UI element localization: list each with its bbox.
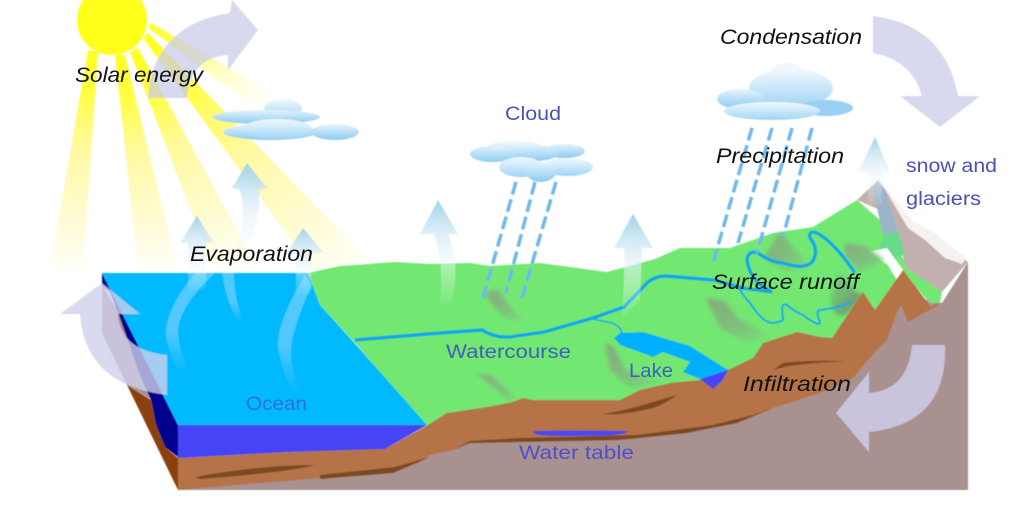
lake bbox=[614, 332, 728, 379]
ocean surface bbox=[102, 273, 427, 425]
snow patch bbox=[868, 248, 903, 280]
cloud: centre bbox=[470, 141, 593, 182]
cloud: right bbox=[717, 63, 853, 120]
ocean cliff bbox=[102, 285, 152, 400]
rain: centre cloud bbox=[483, 182, 556, 298]
label: watercourse: Watercourse bbox=[446, 342, 571, 363]
arrow: condensation down bbox=[873, 16, 980, 127]
evaporation arrows bbox=[180, 137, 890, 318]
label: infiltration: Infiltration bbox=[743, 373, 851, 396]
evaporation waves over ocean bbox=[166, 273, 312, 392]
coast soil edge bbox=[127, 385, 178, 490]
label: snow and: snow and bbox=[906, 156, 997, 177]
mountain bbox=[857, 180, 968, 292]
hill shadows bbox=[477, 232, 885, 403]
landscape block bbox=[102, 180, 968, 490]
runoff branch bbox=[738, 287, 850, 324]
green patch bbox=[878, 232, 905, 262]
label: cloud: Cloud bbox=[505, 104, 561, 125]
snow cap bbox=[880, 181, 966, 264]
water table bbox=[533, 430, 628, 436]
bedrock bbox=[178, 262, 968, 490]
sun rays bbox=[50, 23, 372, 268]
land surface bbox=[308, 200, 942, 427]
label: precipitation: Precipitation bbox=[716, 145, 844, 168]
arrow: ocean rising bbox=[60, 283, 167, 395]
icon: sun bbox=[77, 0, 147, 55]
lake feeder bbox=[593, 319, 622, 335]
ocean side wall bbox=[178, 425, 427, 458]
label: condensation: Condensation bbox=[720, 26, 862, 49]
label: ocean: Ocean bbox=[246, 394, 307, 415]
label: water table: Water table bbox=[519, 443, 634, 464]
lake depth bbox=[700, 370, 728, 389]
label: glaciers: glaciers bbox=[906, 189, 981, 210]
label: solar energy: Solar energy bbox=[75, 64, 205, 87]
soil layer bbox=[178, 270, 938, 490]
arrow: solar energy up bbox=[148, 0, 258, 98]
label: surface runoff: Surface runoff bbox=[712, 271, 861, 294]
rain: right cloud bbox=[713, 128, 812, 263]
deep water edge bbox=[102, 273, 178, 457]
cloud: left bbox=[212, 99, 359, 140]
label: evaporation: Evaporation bbox=[190, 243, 313, 266]
label: lake: Lake bbox=[629, 361, 673, 382]
meltwater stream bbox=[873, 180, 898, 235]
watercourse bbox=[355, 232, 855, 340]
dark soil streaks bbox=[195, 361, 846, 479]
arrow: groundwater return bbox=[836, 345, 945, 452]
